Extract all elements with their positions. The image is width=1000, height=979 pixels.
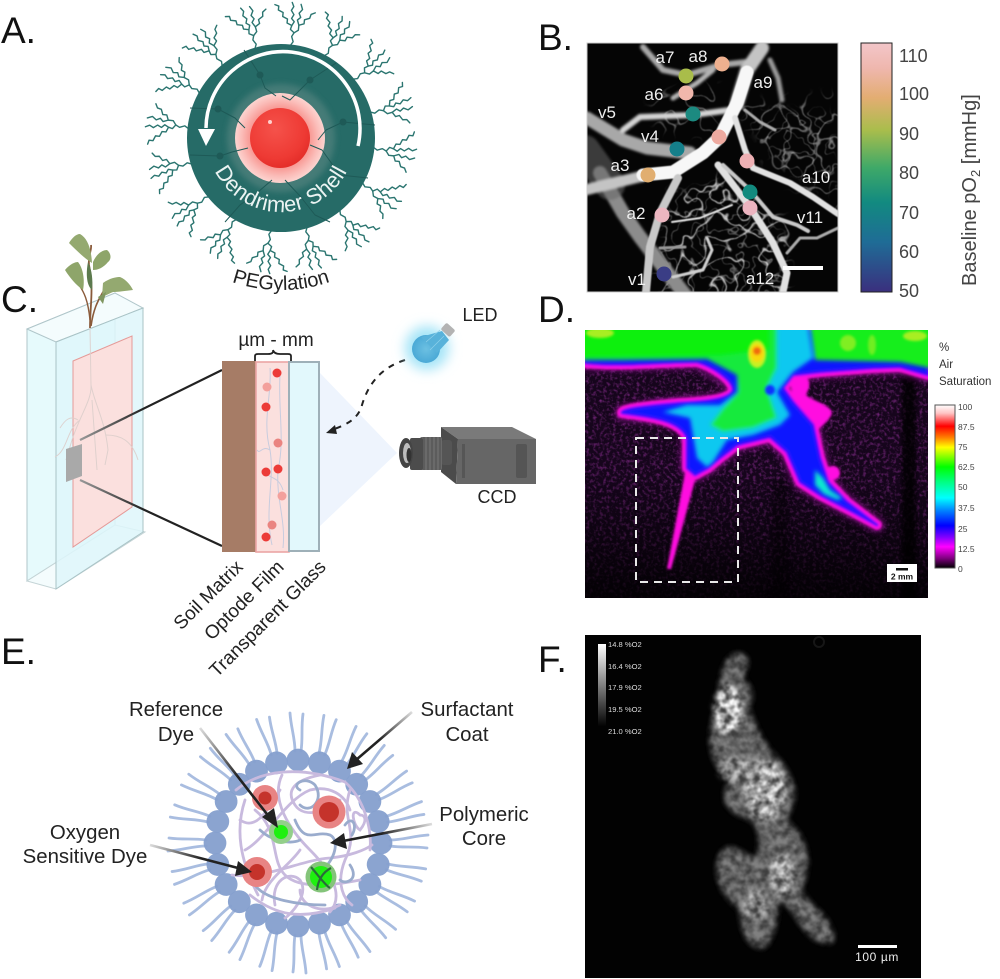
red core	[250, 108, 310, 168]
colour bar: baseline pO2	[861, 43, 983, 301]
colour bar: baseline pO2: 110	[899, 46, 928, 66]
rhizobox glass	[27, 293, 145, 589]
vessel labels: v1	[628, 270, 646, 289]
colour bar: baseline pO2: 2	[968, 170, 983, 177]
panel A: dendrimer nanoprobe	[144, 2, 418, 294]
layer labels: Transparent Glass	[206, 557, 331, 682]
colour bar: baseline pO2: [mmHg]	[959, 94, 981, 170]
scale bar	[887, 564, 917, 582]
label: reference dye: Reference	[129, 699, 223, 721]
dye: oxygen sensitive	[242, 785, 346, 887]
vessel labels: v11	[797, 208, 823, 227]
legend title: Saturation	[939, 376, 991, 388]
panel B: vascular pO2 map	[585, 43, 845, 300]
panel D: root oxygen map	[585, 330, 991, 598]
colour scale: 16.4 %O2	[608, 662, 642, 671]
arrow: oxygen sensitive dye	[150, 845, 252, 876]
colour bar: air saturation: 75	[958, 442, 968, 452]
legend title	[939, 342, 991, 388]
capillary network	[650, 175, 790, 300]
panel label: E: E.	[1, 631, 36, 672]
thickness label: µm - mm	[238, 330, 314, 351]
arteries	[643, 72, 838, 292]
label: oxygen sensitive dye: Sensitive Dye	[23, 846, 147, 868]
LED label: LED	[462, 305, 498, 325]
cross-section: soil, film, glass	[222, 361, 397, 552]
curved label: PEGylation: PEGylation	[233, 269, 329, 294]
panel C: planar optode setup	[27, 234, 536, 682]
legend title: %	[939, 342, 949, 354]
vessel labels: a3	[611, 156, 629, 175]
panel label: C: C.	[1, 279, 38, 320]
roots	[55, 328, 138, 470]
surfactant coat	[168, 713, 428, 973]
light path arrow	[326, 360, 405, 434]
vessel labels: a10	[802, 168, 830, 187]
colour bar: baseline pO2: 90	[899, 124, 919, 144]
dendrimer shell	[187, 44, 375, 232]
icon: CCD camera	[399, 427, 536, 484]
dye: reference large	[306, 862, 336, 892]
label: oxygen sensitive dye	[23, 822, 147, 868]
arrow: polymeric core	[330, 824, 432, 849]
colour scale	[598, 640, 642, 736]
vessel labels: a6	[645, 85, 663, 104]
angiogram image	[585, 43, 845, 300]
label: oxygen sensitive dye: Oxygen	[50, 822, 120, 844]
colour bar: baseline pO2: 70	[899, 203, 919, 223]
colour bar: air saturation: 50	[958, 482, 968, 492]
plant	[65, 234, 133, 328]
label: polymeric core: Polymeric	[439, 804, 529, 826]
vessel labels: a7	[656, 48, 674, 67]
panel label: A: A.	[1, 10, 36, 51]
label: reference dye: Dye	[158, 724, 194, 746]
panel label: F: F.	[538, 639, 567, 680]
label: polymeric core	[439, 804, 529, 850]
label: reference dye	[129, 699, 223, 746]
colour scale: 14.8 %O2	[608, 640, 642, 649]
curved label: Dendrimer Shell: Dendrimer Shell	[215, 164, 346, 212]
vessel labels: v5	[598, 103, 616, 122]
label: surfactant coat: Surfactant	[421, 699, 514, 721]
vessel labels: a2	[627, 204, 645, 223]
vessel labels: v4	[641, 127, 659, 146]
polymeric core	[232, 772, 372, 918]
label: polymeric core: Core	[462, 828, 506, 850]
scale bar: 100 µm	[855, 950, 899, 964]
colour bar: air saturation	[935, 402, 975, 574]
colour bar: air saturation: 100	[958, 402, 972, 412]
colour bar: baseline pO2: 50	[899, 281, 919, 301]
legend title: Air	[939, 359, 953, 371]
optode film in box	[73, 336, 132, 547]
colour bar: air saturation: 0	[958, 564, 963, 574]
panel F: oxygen image of tissue	[585, 635, 921, 978]
colour bar: baseline pO2: Baseline pO	[959, 177, 981, 286]
colour bar: air saturation: 37.5	[958, 503, 975, 513]
label: surfactant coat	[421, 699, 514, 746]
arrow: reference dye	[200, 728, 278, 828]
icon: LED bulb	[405, 323, 455, 370]
colour scale: 21.0 %O2	[608, 727, 642, 736]
PEG branches	[144, 1, 418, 275]
colour bar: baseline pO2: 100	[899, 84, 929, 104]
colour bar: baseline pO2: 80	[899, 163, 919, 183]
vessel labels: a12	[746, 269, 774, 288]
vessel labels: a9	[754, 73, 772, 92]
colour bar: air saturation: 62.5	[958, 462, 975, 472]
optode image	[585, 330, 928, 598]
colour bar: air saturation: 87.5	[958, 422, 975, 432]
sampled region	[66, 444, 82, 482]
colour bar: baseline pO2: 60	[899, 242, 919, 262]
scale bar: 2 mm	[891, 572, 914, 582]
colour scale: 17.9 %O2	[608, 683, 642, 692]
panel label: B: B.	[538, 17, 573, 58]
colour bar: air saturation: 12.5	[958, 544, 975, 554]
core glow	[227, 84, 335, 192]
vessel labels: a8	[689, 47, 707, 66]
tissue	[711, 637, 833, 948]
CCD label: CCD	[478, 487, 516, 507]
vessel labels	[598, 47, 830, 289]
arrow: surfactant coat	[347, 712, 412, 769]
dye: reference	[269, 820, 293, 844]
rotation arrow	[198, 52, 360, 146]
dashed inset	[636, 438, 738, 582]
colour bar: air saturation: 25	[958, 524, 968, 534]
scale bar	[783, 266, 823, 270]
thickness brace	[255, 350, 291, 361]
layer labels: Optode Film	[201, 557, 289, 645]
layer labels: Soil Matrix	[170, 556, 248, 634]
panel E: nanoparticle schematic	[23, 699, 529, 973]
colour scale: 19.5 %O2	[608, 705, 642, 714]
pO2 measurement points	[640, 56, 758, 282]
zoom lines	[80, 370, 222, 546]
panel label: D: D.	[538, 289, 575, 330]
label: surfactant coat: Coat	[445, 724, 489, 746]
